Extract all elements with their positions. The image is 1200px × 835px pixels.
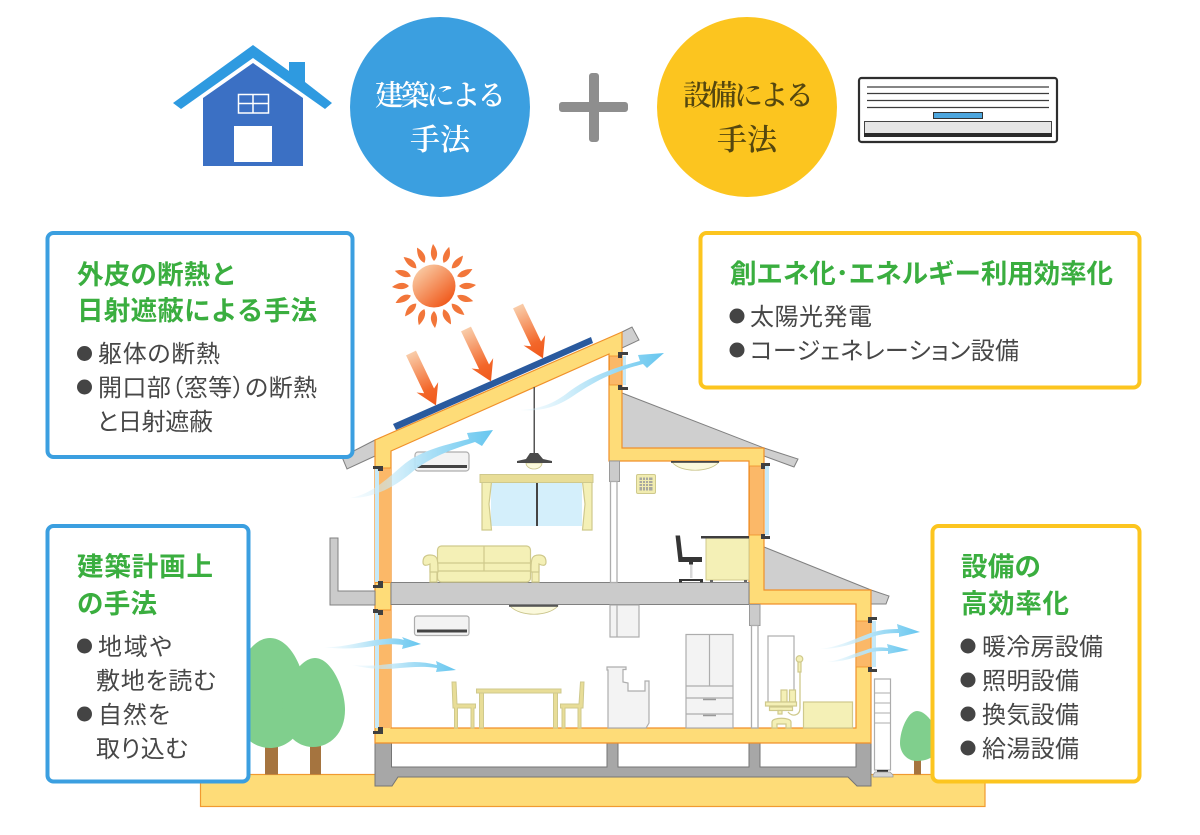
heading: envelope	[77, 260, 318, 326]
list: planning items: 地域や	[98, 634, 172, 661]
icon: plus sign	[559, 73, 628, 142]
yellow circle: equipment methods	[657, 17, 837, 197]
lower ceiling light	[509, 605, 558, 614]
downstairs air conditioner	[414, 616, 469, 636]
heading: high efficiency	[961, 552, 1069, 619]
upper kitchen cabinet	[610, 605, 639, 637]
list: equipment items: 換気設備	[982, 702, 1079, 729]
foundation	[375, 743, 871, 786]
chair	[676, 536, 703, 582]
upstairs air conditioner	[415, 452, 469, 471]
list: planning items: 敷地を読む	[96, 668, 216, 695]
heading: envelope: 日射遮蔽による手法	[77, 296, 318, 326]
heading: planning: の手法	[77, 589, 158, 619]
window brackets	[373, 352, 877, 734]
list: equipment items: 暖冷房設備	[982, 634, 1103, 661]
list: equipment items	[960, 634, 1103, 763]
heading: high efficiency: 高効率化	[961, 589, 1069, 619]
panel: high efficiency equipment	[932, 526, 1140, 782]
list: energy items: 太陽光発電	[750, 304, 872, 331]
list: planning items: 取り込む	[96, 736, 188, 763]
house insulation shell	[375, 332, 871, 743]
heading: planning	[77, 552, 213, 619]
list: equipment items: 照明設備	[982, 668, 1079, 695]
blue circle: architecture methods	[350, 17, 530, 197]
sunlight arrows	[400, 301, 554, 411]
panel: building planning	[48, 526, 248, 782]
ground	[200, 774, 985, 806]
list: planning items: 自然を	[98, 702, 170, 729]
icon: air conditioner	[859, 78, 1057, 142]
second floor slab	[391, 582, 749, 604]
list: equipment items: 給湯設備	[982, 736, 1079, 763]
window with curtains	[480, 474, 593, 530]
blue circle: architecture methods: 手法	[410, 124, 472, 157]
heading: planning: 建築計画上	[77, 552, 213, 582]
yellow circle: equipment methods: 設備による	[683, 80, 814, 112]
dining table and chairs	[452, 682, 584, 728]
kitchen counter	[607, 667, 649, 728]
gray roofs and eaves	[342, 327, 889, 604]
list: envelope items: と日射遮蔽	[97, 409, 213, 436]
heading: high efficiency: 設備の	[961, 552, 1041, 582]
solar panel	[393, 337, 593, 430]
icon: sun	[392, 244, 476, 328]
panel: envelope insulation and solar shading	[48, 233, 352, 457]
tower fan	[873, 679, 893, 777]
sofa	[423, 546, 546, 582]
list: planning items	[77, 634, 216, 763]
pendant light	[517, 387, 552, 469]
bathroom	[766, 636, 852, 728]
list: energy items	[730, 304, 1019, 365]
heading: energy creation: 創エネ化･エネルギー利用効率化	[730, 259, 1113, 289]
list: envelope items: 躯体の断熱	[98, 341, 220, 368]
list: envelope items	[77, 341, 317, 436]
tree right	[900, 711, 940, 774]
list: energy items: コージェネレーション設備	[750, 338, 1019, 365]
trees left	[233, 638, 345, 774]
partition upper floor	[610, 461, 620, 582]
cupboard	[686, 634, 733, 728]
ceiling light upper room	[671, 461, 719, 470]
list: envelope items: 開口部（窓等）の断熱	[98, 375, 317, 402]
icon: blue house	[173, 45, 332, 166]
panel: energy creation and efficiency	[700, 233, 1140, 388]
vent	[636, 474, 656, 494]
partition lower floor	[750, 604, 760, 728]
wind arrows	[323, 353, 920, 672]
yellow circle: equipment methods: 手法	[717, 124, 779, 157]
blue circle: architecture methods: 建築による	[375, 80, 506, 112]
balcony	[330, 538, 375, 605]
insulated walls and window glass	[375, 356, 876, 728]
desk	[701, 536, 749, 582]
heading: envelope: 外皮の断熱と	[77, 260, 237, 290]
